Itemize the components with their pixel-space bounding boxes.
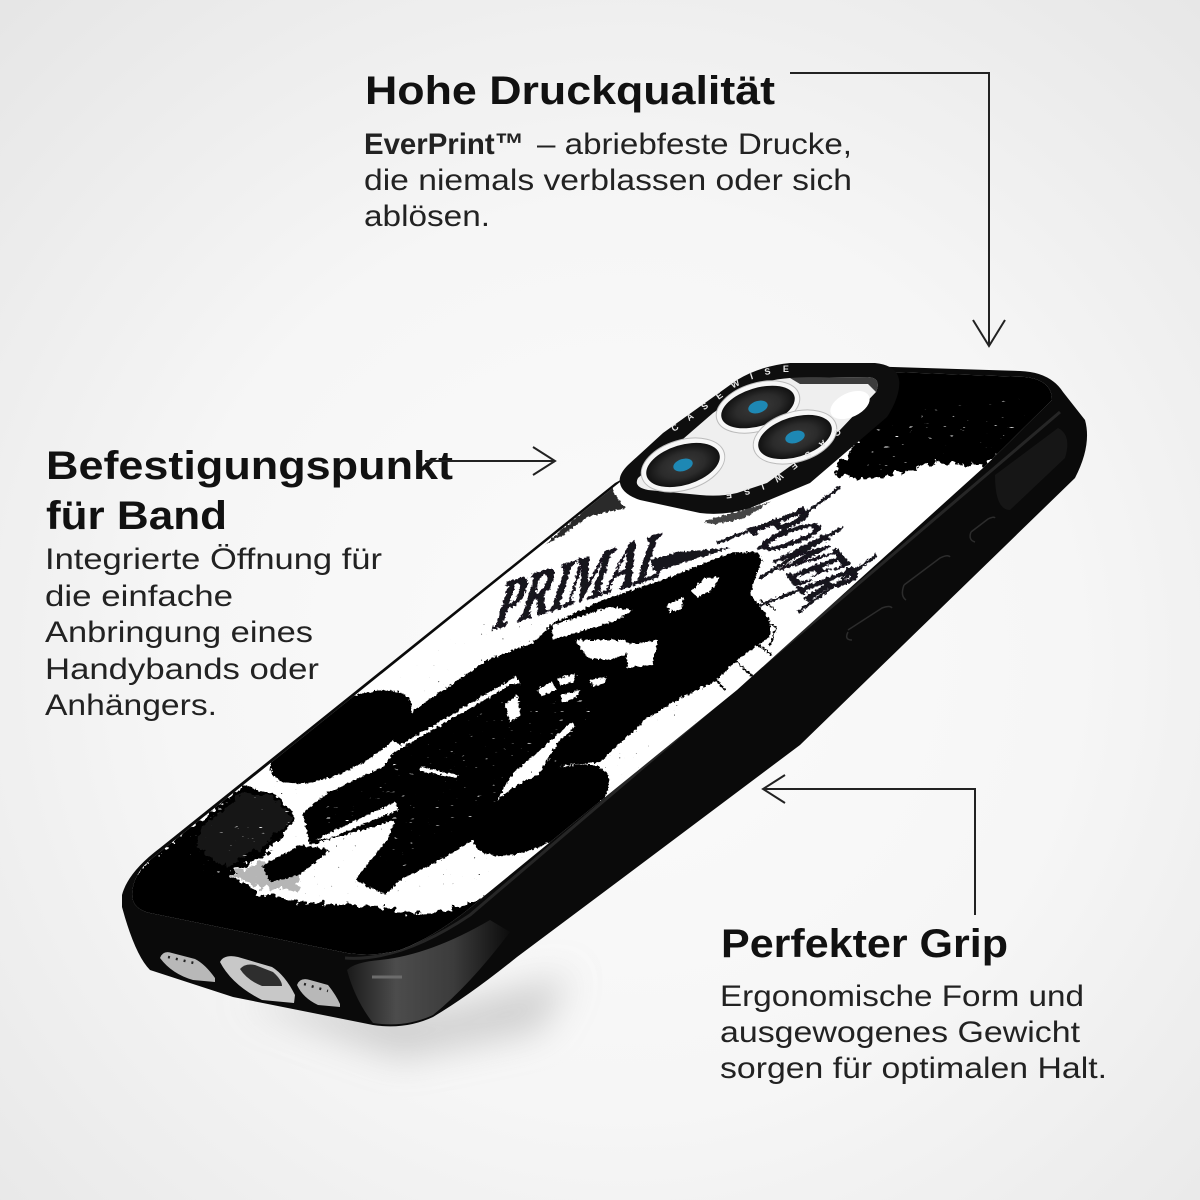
right dumbbell (473, 764, 610, 857)
heading: Hohe Druckqualität (365, 69, 775, 113)
arrow: strap attachment (425, 447, 555, 475)
heading: Befestigungspunkt (46, 444, 453, 488)
upper left grey splatter (545, 487, 770, 545)
body text (720, 980, 1107, 1085)
hair strands (715, 600, 776, 690)
body text: Integrierte Öffnung für (45, 543, 382, 576)
side switch (995, 428, 1067, 510)
artwork text: PRIMAL: PRIMAL (486, 514, 680, 646)
body text: Handybands oder (45, 653, 319, 686)
torso and legs (303, 684, 600, 895)
body text: EverPrint™ (364, 128, 524, 161)
body text: ausgewogenes Gewicht (720, 1016, 1081, 1049)
left dumbbell (270, 690, 412, 784)
white gaps across figure (315, 577, 720, 840)
hair white patches (575, 640, 635, 660)
body text: Anhängers. (45, 689, 217, 722)
right arm (538, 719, 646, 776)
top white hatching (867, 398, 1025, 470)
charging port (220, 956, 295, 1003)
camera brand text: CASEWISE (672, 366, 789, 431)
corner highlight streak (372, 976, 402, 978)
phone case (122, 363, 1088, 1026)
thigh scar (420, 767, 458, 778)
artwork text: PRIMAL (491, 532, 730, 632)
side buttons (847, 517, 995, 640)
body text: ablösen. (364, 200, 490, 233)
camera glass (637, 377, 878, 496)
callout: Befestigungspunkt (45, 444, 453, 722)
artwork text: POWER (717, 487, 881, 612)
body text: Ergonomische Form und (720, 980, 1084, 1013)
body text: sorgen für optimalen Halt. (720, 1052, 1107, 1085)
camera brand text (672, 366, 840, 498)
arrow: print quality (790, 73, 1005, 346)
heading: für Band (46, 494, 227, 538)
printed artwork (132, 372, 1052, 954)
corner gloss (347, 920, 510, 1024)
glass bevel (790, 377, 878, 392)
heading: Perfekter Grip (721, 922, 1008, 966)
callout: Hohe Druckqualität (364, 69, 852, 233)
arm and chest (392, 672, 516, 746)
case body (122, 365, 1087, 1026)
body text: Anbringung eines (45, 616, 313, 649)
camera brand text: CASEWISE (726, 429, 840, 498)
camera bump (620, 363, 899, 514)
hair and head (470, 552, 770, 740)
flash (826, 385, 874, 425)
side edge highlight (345, 412, 1060, 958)
lens 2 (747, 401, 843, 473)
body text (45, 543, 382, 722)
white specks on figure (326, 700, 590, 866)
arrow: grip (763, 775, 975, 915)
body text: – abriebfeste Drucke, (537, 128, 852, 161)
bottom white hatching (190, 792, 290, 880)
printed artwork: POWER (729, 500, 881, 609)
artwork white base (132, 372, 1052, 954)
figure silhouette (257, 552, 776, 895)
fine black spatter (230, 620, 700, 900)
chest white patches (537, 682, 556, 696)
lower foot blob (262, 845, 330, 882)
phone shadow (240, 975, 570, 1058)
leg gap (315, 802, 398, 840)
callout: Perfekter Grip (720, 922, 1107, 1085)
bottom speaker right (297, 979, 340, 1007)
camera ring (620, 363, 899, 514)
body text (364, 128, 852, 233)
heading (46, 444, 453, 538)
bottom black area (132, 785, 485, 954)
body text: die niemals verblassen oder sich (364, 164, 852, 197)
lens 3 (635, 429, 731, 501)
lens 1 (710, 371, 806, 443)
body text: die einfache (45, 580, 233, 613)
top black area (832, 372, 1052, 481)
bottom speaker left (160, 952, 215, 982)
